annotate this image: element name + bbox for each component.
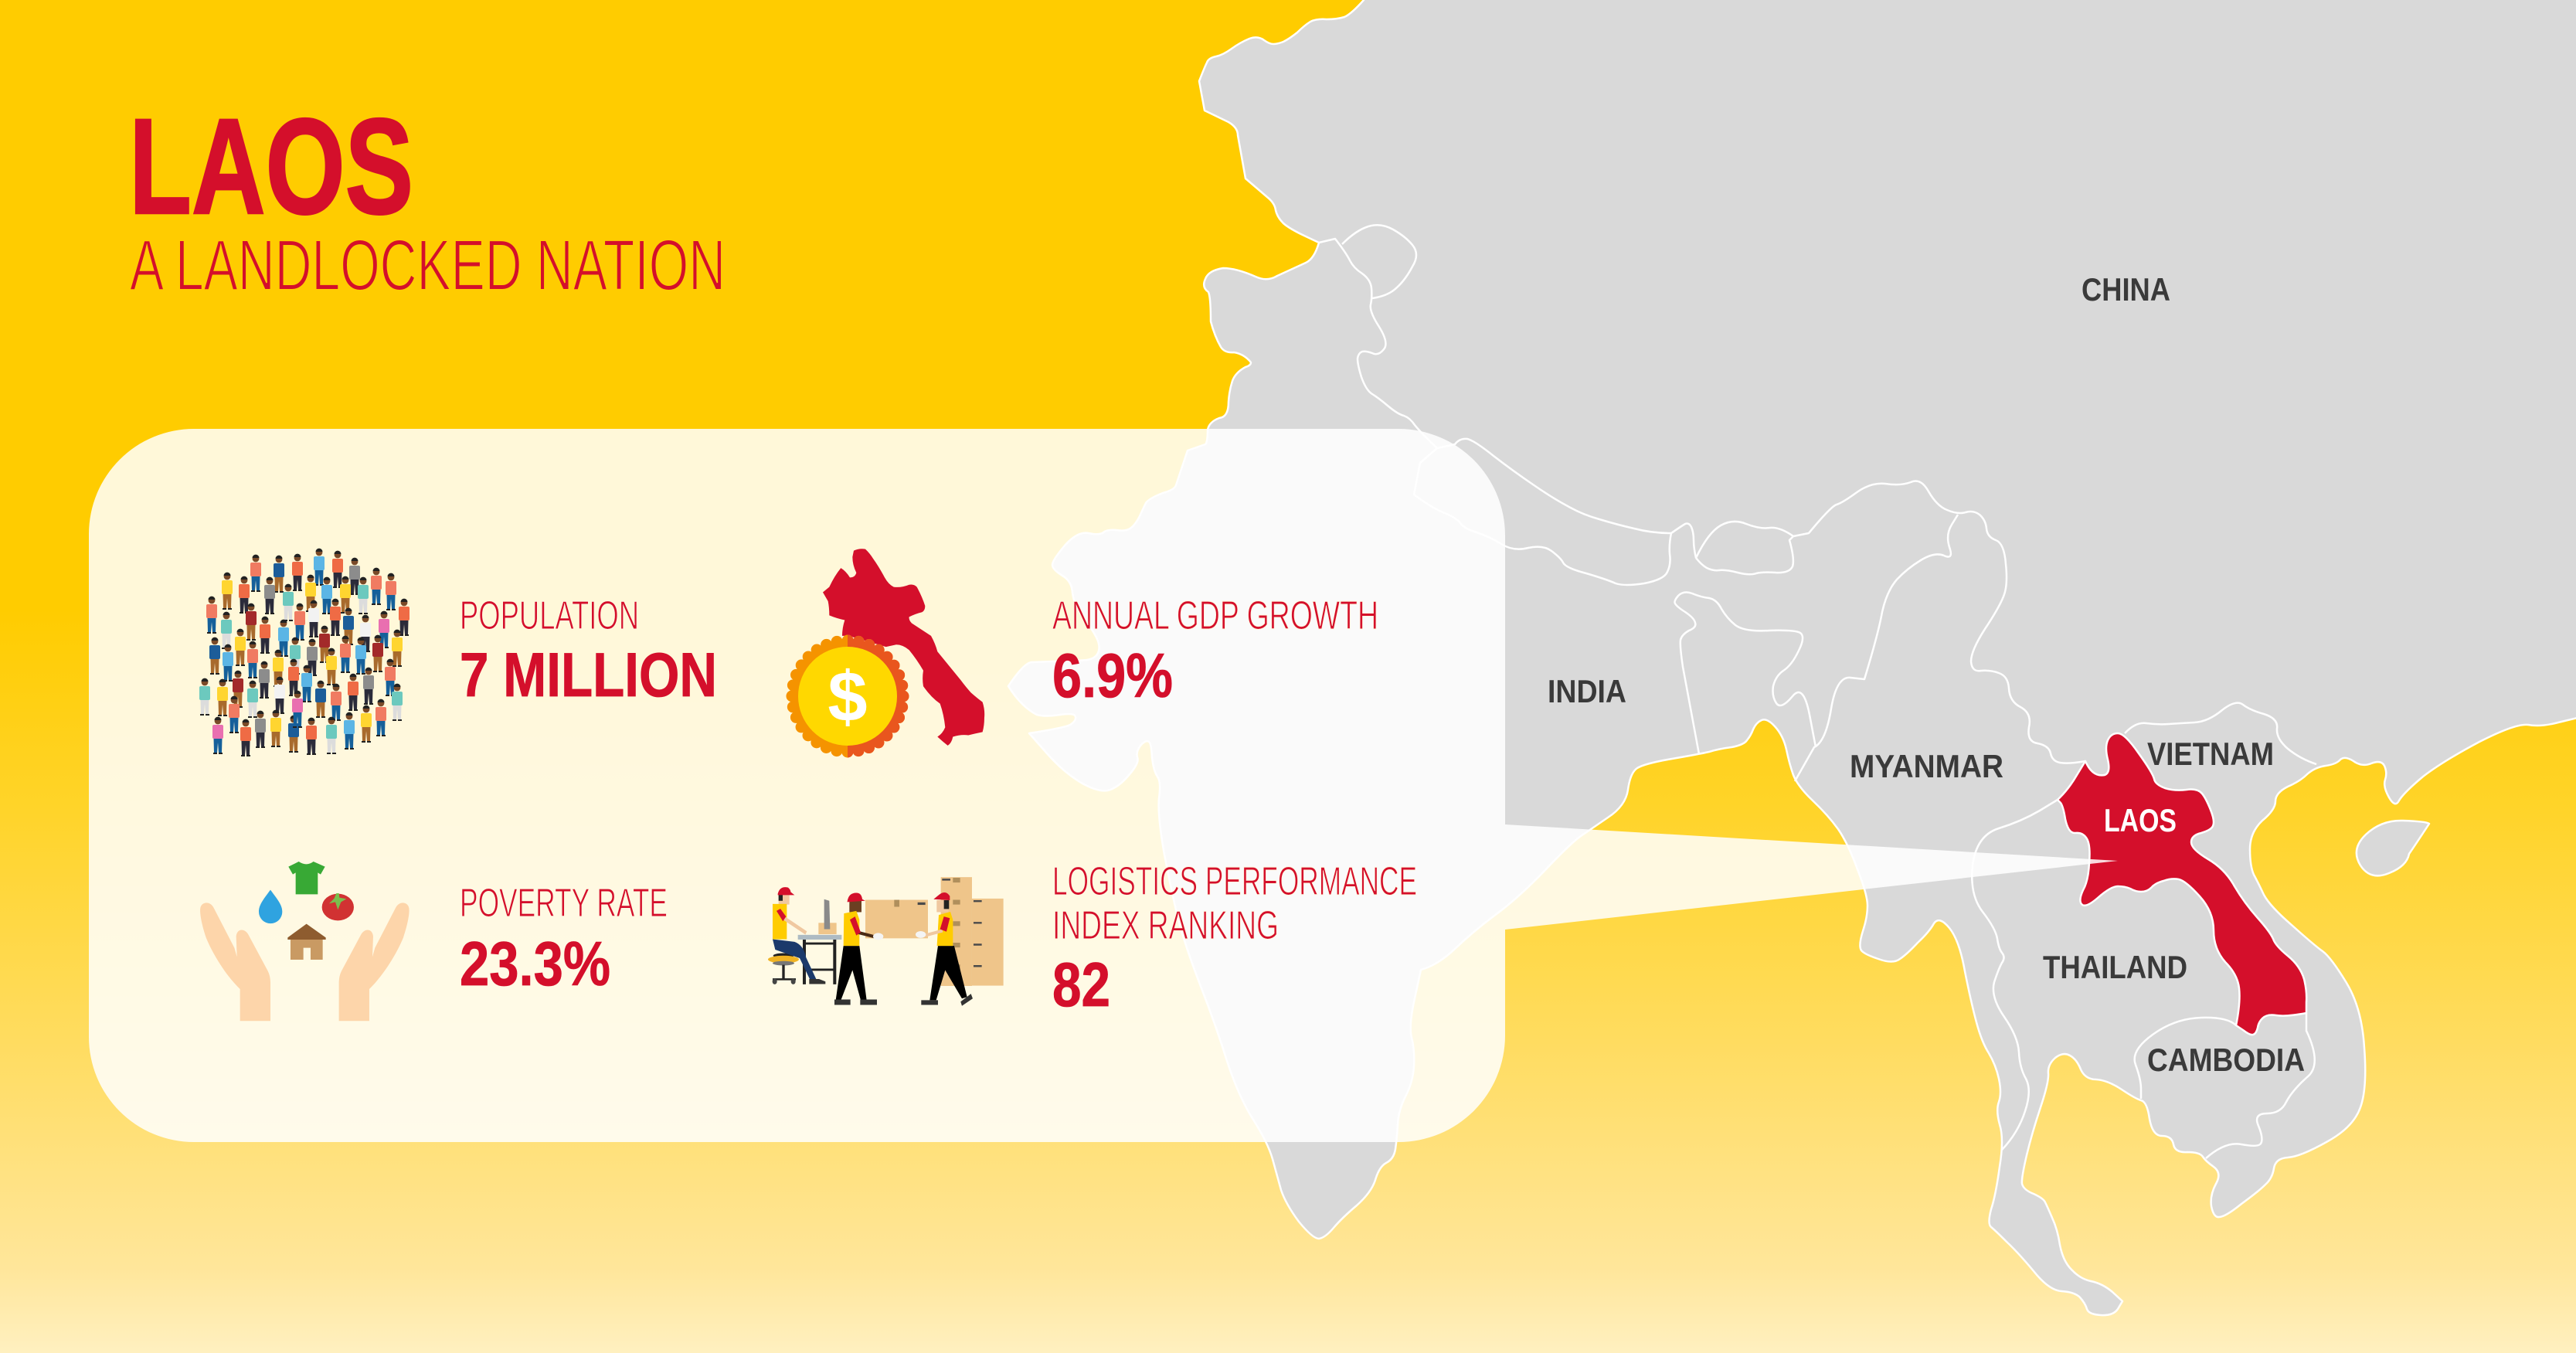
- translucent info panel with pointer to laos: [89, 429, 2118, 1142]
- t-shirt: [288, 862, 325, 894]
- subtitle: A LANDLOCKED NATION: [130, 225, 726, 305]
- title: LAOS: [129, 91, 413, 243]
- label: logistics performance index ranking: [1052, 859, 1417, 948]
- label: annual gdp growth: ANNUAL GDP GROWTH: [1052, 593, 1378, 638]
- map label: myanmar: MYANMAR: [1850, 748, 2003, 784]
- label: poverty rate: POVERTY RATE: [460, 881, 668, 926]
- carried box: [865, 900, 928, 938]
- seated worker: [768, 887, 825, 984]
- map label: laos: LAOS: [2104, 802, 2177, 838]
- map label: china: CHINA: [2082, 271, 2170, 308]
- map label: india: INDIA: [1548, 673, 1626, 709]
- value: logistics ranking: 82: [1052, 950, 1110, 1020]
- map label: cambodia: CAMBODIA: [2147, 1042, 2305, 1078]
- label: logistics performance index ranking: INDEX RANKING: [1052, 903, 1279, 948]
- coin: [792, 641, 903, 752]
- standing worker right: [916, 892, 973, 1006]
- desk and computer: [798, 899, 841, 984]
- island: hainan: [2357, 821, 2429, 875]
- icon: logistics workers with boxes: [768, 877, 1004, 1006]
- water drop: [259, 890, 282, 923]
- map label: thailand: THAILAND: [2043, 949, 2187, 985]
- value: gdp growth: 6.9%: [1052, 641, 1173, 711]
- icon: laos map with coin: [792, 549, 984, 752]
- laos silhouette: [823, 549, 984, 746]
- standing worker left: [834, 893, 883, 1005]
- tomato: [322, 893, 354, 920]
- label: logistics performance index ranking: LOGISTICS PERFORMANCE: [1052, 859, 1417, 904]
- house: [287, 924, 326, 960]
- left hand: [200, 903, 270, 1021]
- coin: $: [828, 658, 868, 736]
- map label: vietnam: VIETNAM: [2147, 736, 2274, 772]
- land mass: [1008, 0, 2576, 1315]
- icon: crowd of people: [199, 549, 410, 756]
- value: poverty rate: 23.3%: [460, 930, 610, 999]
- map of south and southeast asia: [1008, 0, 2576, 1315]
- value: population: 7 MILLION: [460, 641, 717, 710]
- icon: hands holding necessities: [200, 862, 410, 1021]
- laos highlighted in red: [2058, 733, 2306, 1035]
- label: population: POPULATION: [460, 593, 639, 638]
- box stack: [941, 877, 1004, 986]
- country borders: [1319, 225, 2316, 1158]
- right hand: [339, 903, 410, 1021]
